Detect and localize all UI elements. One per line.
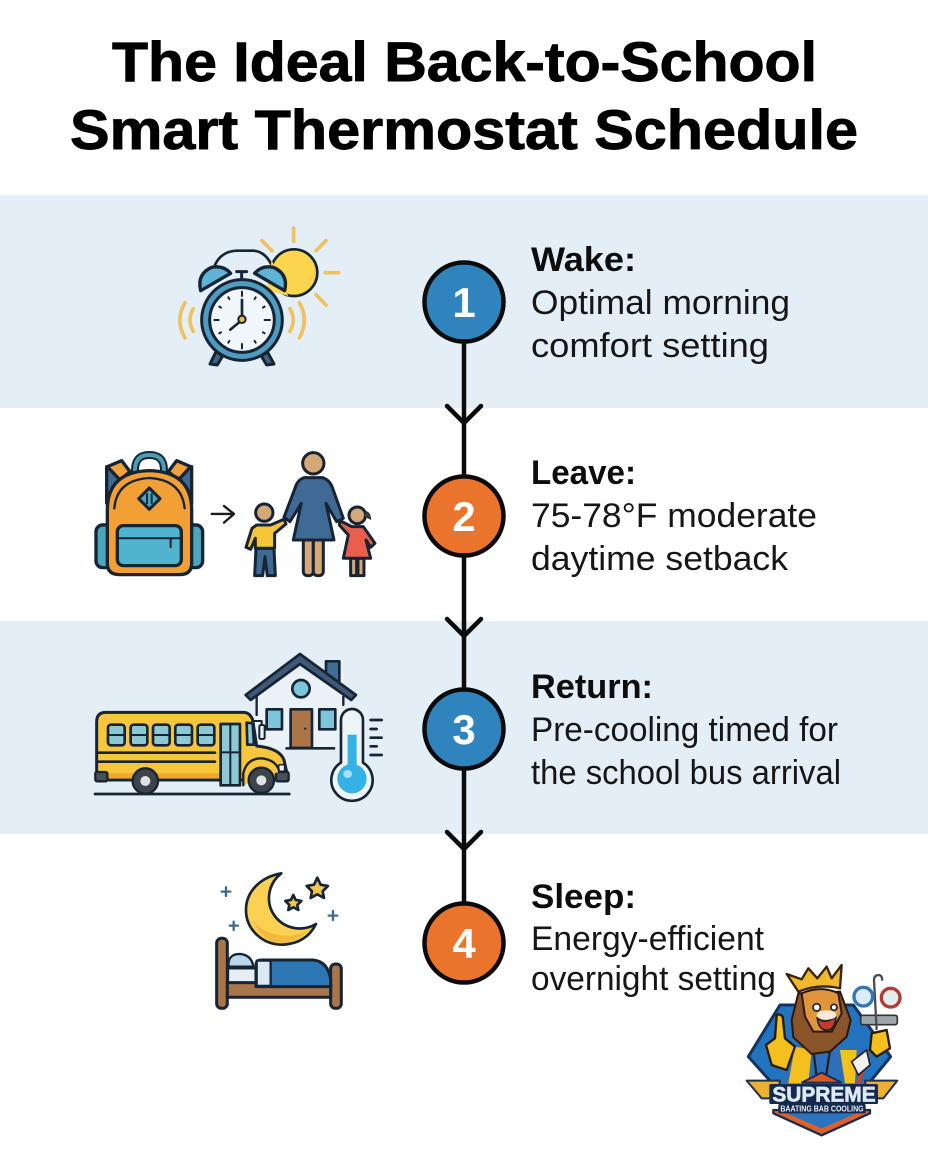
clock bell handle [214,251,272,267]
sub-wordmark [778,1104,866,1113]
clock bells [200,267,231,291]
sun rays [180,228,339,338]
step 3 number badge [424,690,504,768]
gloved hand [870,1030,890,1057]
text block: sleep: Energy-efficient [531,920,765,958]
step 4 number badge: 4 [452,920,476,967]
shield base [773,1110,870,1135]
icon: moon, stars and bed [217,873,341,1008]
text block: wake [531,241,790,365]
logo: Supreme mascot badge: BAATING BAB COOLING [780,1104,864,1113]
boy [256,504,273,521]
pointing hand [766,1014,795,1070]
backpack straps and handle [107,467,127,503]
text block: leave: Leave: [531,454,636,492]
step 2 number badge [424,476,504,556]
step 1 number badge [424,262,504,342]
clock legs [210,352,274,365]
title: Smart Thermostat Schedule [70,98,858,161]
mane and beard [792,992,851,1054]
sparkles [222,887,337,930]
text block: sleep [531,878,776,998]
title [70,30,858,161]
text block: sleep: overnight setting [531,960,776,998]
clock ticks [214,292,270,348]
stars [307,878,328,898]
face [802,989,842,1032]
girl [349,507,366,524]
backpack front pocket [117,526,181,566]
panel: return band [0,621,928,834]
icon: school bus, house and thermometer [95,654,382,801]
step 3 number badge: 3 [452,706,476,753]
step 1 number badge: 1 [452,279,476,326]
wings [747,1081,897,1098]
bus [96,712,287,780]
timeline connector with arrows [447,340,481,905]
text block: wake: Optimal morning [531,284,790,322]
crown [787,965,842,992]
backpack body [107,471,192,575]
step 2 number badge: 2 [452,493,476,540]
moon [246,873,316,945]
backpack side pockets [96,525,113,568]
mother [303,453,324,474]
logo: Supreme mascot badge: SUPREME [772,1083,876,1107]
title: The Ideal Back-to-School [112,30,817,93]
hexagon badge [748,1005,891,1090]
logo: Supreme mascot badge [747,965,900,1135]
mascot body [783,1047,863,1083]
text block: wake: Wake: [531,241,636,279]
text block: return: Pre-cooling timed for [531,711,838,749]
arrow [212,506,234,523]
text block: return: Return: [531,668,653,706]
backpack badge [139,488,160,509]
clock hands [230,300,242,330]
wrench strap [858,1053,868,1083]
gauges [861,1015,897,1025]
step 4 number badge [424,904,504,982]
bed [217,938,227,1008]
sun [271,249,317,296]
text block: wake: comfort setting [531,327,769,365]
clock body [202,280,282,360]
panel: wake band [0,195,928,408]
house [257,673,344,748]
text block: return [531,668,841,792]
text block: leave: daytime setback [531,540,789,578]
text block: return: the school bus arrival [531,754,841,792]
text block: sleep: Sleep: [531,878,636,916]
text block: leave: 75-78°F moderate [531,497,817,535]
text block: leave [531,454,817,578]
icon: backpack, arrow and family [96,453,375,576]
icon: alarm clock and sun [180,228,339,365]
wordmark [769,1084,878,1104]
thermometer [331,709,373,801]
